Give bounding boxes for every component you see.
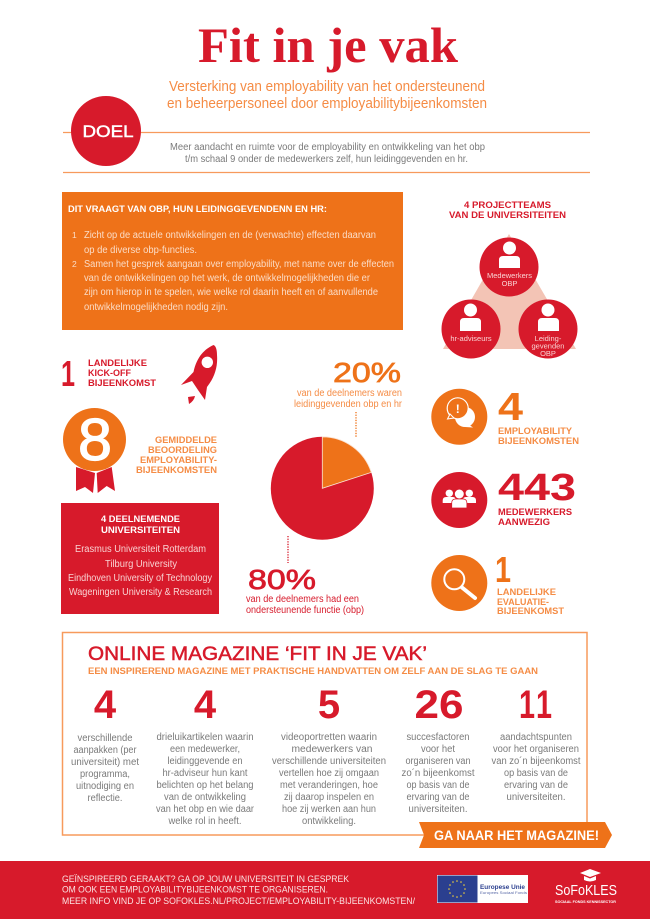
subtitle: en beheerpersoneel door employabilitybijeenkomsten <box>167 96 487 112</box>
button: go to magazine <box>419 822 612 848</box>
callout: 80 percent: 80% <box>248 564 316 595</box>
stat: employability bijeenkomsten: EMPLOYABILITY <box>498 426 573 437</box>
team: leidinggevenden: OBP <box>540 349 556 358</box>
panel: requirements <box>62 192 403 330</box>
stat: evaluatie bijeenkomst: EVALUATIE- <box>497 597 549 608</box>
requirements list: 1 <box>72 230 77 240</box>
rating label <box>136 435 217 476</box>
callout: 20 percent <box>294 357 403 438</box>
column 4: op basis van de <box>406 780 470 791</box>
stat: evaluatie bijeenkomst: LANDELIJKE <box>497 587 556 598</box>
column 5: aandachtspunten <box>500 732 572 743</box>
panel: online magazine <box>62 632 587 835</box>
panel: universities: 4 DEELNEMENDE <box>101 514 180 525</box>
kick-off stat: BIJEENKOMST <box>88 378 156 389</box>
callout: 80 percent: ondersteunende functie (obp) <box>246 605 364 616</box>
requirements list: ontwikkelmogelijkheden nodig zijn. <box>84 302 228 313</box>
title: Fit in je vak <box>198 17 458 73</box>
magazine subheading: EEN INSPIREREND MAGAZINE MET PRAKTISCHE HANDVATTEN OM ZELF AAN DE SLAG TE GAAN <box>88 666 538 677</box>
column 4 <box>402 683 475 815</box>
column 4: organiseren van <box>406 756 470 767</box>
column 3: zij daarop inspelen en <box>284 792 374 803</box>
column 5: van zo´n bijeenkomst <box>492 755 581 767</box>
kick-off stat: KICK-OFF <box>88 368 131 379</box>
column 2: 4 <box>194 683 217 727</box>
column 3: 5 <box>318 683 340 727</box>
team: medewerkers: Medewerkers <box>487 271 532 280</box>
panel: universities: Eindhoven University of Technology <box>68 573 212 584</box>
column 3: ontwikkeling. <box>302 816 356 827</box>
column 3: videoportretten waarin <box>281 732 377 743</box>
column 2: leidinggevende en <box>168 756 242 767</box>
project teams heading <box>449 200 566 221</box>
column 3: vertellen hoe zij omgaan <box>279 768 379 779</box>
column 3: medewerkers van <box>292 744 372 755</box>
team: hr-adviseurs: hr-adviseurs <box>450 334 492 343</box>
column 3: met veranderingen, hoe <box>280 780 378 791</box>
footer text: GEÏNSPIREERD GERAAKT? GA OP JOUW UNIVERSITEIT IN GESPREK <box>62 874 350 885</box>
stat: medewerkers aanwezig <box>431 467 576 528</box>
team: medewerkers <box>480 238 538 296</box>
rating label: BEOORDELING <box>148 445 217 456</box>
footer text: OM OOK EEN EMPLOYABILITYBIJEENKOMST TE ORGANISEREN. <box>62 884 328 896</box>
logo: European Union <box>437 875 528 903</box>
requirements list: zijn om hierop in te spelen, wie welke rol daarin heeft en of aanvullende <box>84 287 378 298</box>
callout: 20 percent: 20% <box>333 357 401 388</box>
column 5: ervaring van de <box>504 780 568 791</box>
icon: medal <box>63 407 126 493</box>
icon: speech bubbles <box>431 389 487 445</box>
panel: universities: Wageningen University & Research <box>69 587 212 598</box>
team: leidinggevenden: gevenden <box>532 342 564 350</box>
icon: medal: 8 <box>78 407 112 473</box>
column 2: belichten op het belang <box>156 780 254 791</box>
stat: evaluatie bijeenkomst <box>431 549 564 617</box>
column 1: programma, <box>80 769 130 780</box>
column 4: universiteiten. <box>408 804 468 815</box>
logo: European Union: Europese Unie <box>480 884 525 891</box>
goal section <box>63 96 590 172</box>
column 4: succesfactoren <box>406 732 470 743</box>
column 5: 1 <box>519 683 535 727</box>
triangle <box>443 234 576 349</box>
stat: medewerkers aanwezig: MEDEWERKERS <box>498 507 572 518</box>
team: hr-adviseurs <box>442 300 500 358</box>
column 5: 1 <box>536 683 552 727</box>
column 3: hoe zij werken aan hun <box>282 804 376 815</box>
column 2: van het obp en wie daar <box>156 804 255 815</box>
requirements list: 2 <box>72 259 77 269</box>
column 2: een medewerker, <box>170 744 240 755</box>
logo: Sofokles <box>555 869 617 904</box>
project teams heading: VAN DE UNIVERSITEITEN <box>449 210 566 221</box>
goal badge: DOEL <box>82 122 134 141</box>
column 1: 4 <box>94 683 117 727</box>
column 2: drieluikartikelen waarin <box>156 732 254 743</box>
callout: 80 percent <box>246 536 364 616</box>
panel: universities: UNIVERSITEITEN <box>101 525 180 536</box>
logo: Sofokles: SoFoKLES <box>555 882 617 899</box>
column 1: universiteit) met <box>71 757 139 768</box>
column 4: voor het <box>421 744 455 755</box>
logo: Sofokles: SOCIAAL FONDS KENNISSECTOR <box>555 900 616 904</box>
requirements list: Samen het gesprek aangaan over employability, met name over de effecten <box>84 259 394 270</box>
icon: people <box>431 472 487 528</box>
button: go to magazine: GA NAAR HET MAGAZINE! <box>434 828 599 843</box>
rating label: GEMIDDELDE <box>155 435 217 446</box>
kick-off stat: 1 <box>61 353 75 394</box>
column 4: zo´n bijeenkomst <box>402 767 475 779</box>
subtitle: Versterking van employability van het ondersteunend <box>169 79 485 95</box>
column 1: verschillende <box>78 733 133 744</box>
kick-off stat: LANDELIJKE <box>88 358 147 369</box>
callout: 20 percent: leidinggevenden obp en hr <box>294 399 403 410</box>
panel: project teams <box>442 200 578 358</box>
column 3: verschillende universiteiten <box>272 756 386 767</box>
panel: universities: Tilburg University <box>105 559 177 570</box>
team: leidinggevenden: Leiding- <box>535 334 562 343</box>
column 5: voor het organiseren <box>493 744 579 755</box>
icon: magnifier <box>431 555 487 611</box>
column 1 <box>71 683 139 804</box>
rating stat <box>63 407 217 493</box>
team: leidinggevenden <box>518 300 578 358</box>
column 5: op basis van de <box>504 768 568 779</box>
panel: universities <box>61 503 219 614</box>
footer text: MEER INFO VIND JE OP SOFOKLES.NL/PROJECT/EMPLOYABILITY-BIJEENKOMSTEN/ <box>62 896 415 907</box>
callout: 20 percent: van de deelnemers waren <box>297 388 402 399</box>
panel: universities: Erasmus Universiteit Rotterdam <box>75 544 206 555</box>
column 4: ervaring van de <box>406 792 470 803</box>
column 2: welke rol in heeft. <box>168 816 242 827</box>
goal text: Meer aandacht en ruimte voor de employability en ontwikkeling van het obp <box>170 142 485 153</box>
requirements list <box>72 230 394 313</box>
panel: footer <box>0 861 650 919</box>
rating label: BIJEENKOMSTEN <box>136 465 217 476</box>
column 2 <box>156 683 255 827</box>
logo: European Union: Europees Sociaal Fonds <box>480 890 527 895</box>
footer text <box>62 874 415 907</box>
requirements list: van de ontwikkelingen op het werk, de ontwikkelmogelijkheden die er <box>84 273 371 284</box>
column 5: universiteiten. <box>506 792 566 803</box>
requirements list: Zicht op de actuele ontwikkelingen en de (verwachte) effecten daarvan <box>84 230 376 241</box>
column 4: 26 <box>414 683 464 727</box>
column 1: reflectie. <box>88 793 122 804</box>
callout: 80 percent: van de deelnemers had een <box>246 594 359 605</box>
column 1: aanpakken (per <box>74 745 137 756</box>
kick-off stat <box>61 353 156 394</box>
stat: evaluatie bijeenkomst: 1 <box>495 549 511 590</box>
column 1: uitnodiging en <box>76 781 134 792</box>
stat: medewerkers aanwezig: AANWEZIG <box>498 517 550 528</box>
magazine heading: ONLINE MAGAZINE ‘FIT IN JE VAK’ <box>88 644 427 665</box>
stat: employability bijeenkomsten: 4 <box>498 386 523 429</box>
stat: medewerkers aanwezig: 443 <box>498 467 576 509</box>
project teams heading: 4 PROJECTTEAMS <box>464 200 551 211</box>
column 2: van de ontwikkeling <box>164 792 246 803</box>
stat: employability bijeenkomsten: BIJEENKOMSTEN <box>498 436 579 447</box>
team: medewerkers: OBP <box>502 279 517 288</box>
pie chart <box>271 437 374 540</box>
column 2: hr-adviseur hun kant <box>162 768 248 779</box>
requirements heading: DIT VRAAGT VAN OBP, HUN LEIDINGGEVENDENN EN HR: <box>68 204 327 215</box>
rating label: EMPLOYABILITY- <box>140 455 217 466</box>
goal text: t/m schaal 9 onder de medewerkers zelf, hun leidinggevenden en hr. <box>185 154 468 165</box>
stat: evaluatie bijeenkomst: BIJEENKOMST <box>497 606 564 617</box>
icon: speech bubbles: ! <box>456 402 460 416</box>
goal badge <box>71 96 141 166</box>
stat: employability bijeenkomsten <box>431 386 579 447</box>
icon: rocket <box>181 345 217 404</box>
column 5 <box>492 683 581 803</box>
goal text <box>170 142 485 165</box>
subtitle <box>167 79 487 112</box>
column 3 <box>272 683 386 827</box>
requirements list: op de diverse obp-functies. <box>84 245 197 256</box>
